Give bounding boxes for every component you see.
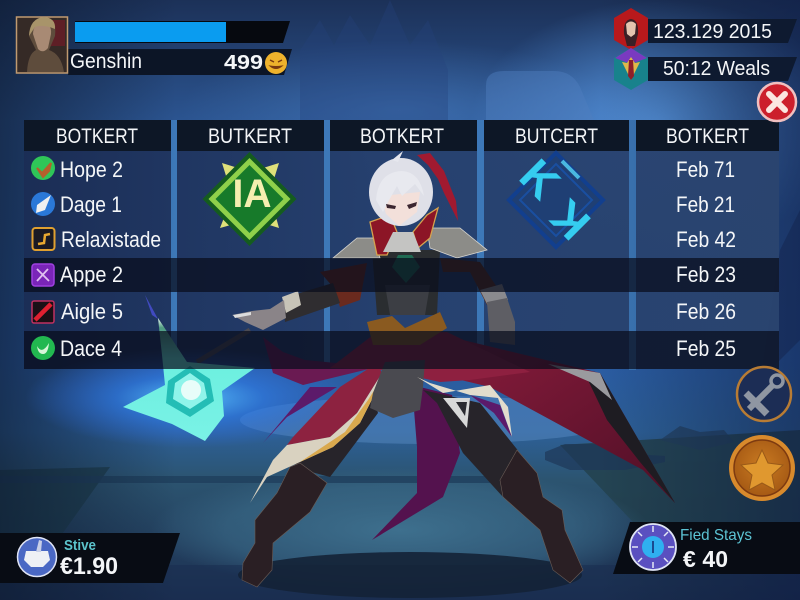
row 2: Dage 1: Dage 1 xyxy=(60,192,122,217)
row 4: Appe 2: Appe 2 xyxy=(60,262,123,287)
icon: gold star coin xyxy=(729,435,795,501)
icon: blue dial xyxy=(630,524,676,570)
panel: bottom left stats: Stive xyxy=(64,537,96,554)
player status panel xyxy=(16,17,292,75)
icon: red hexagon portrait xyxy=(614,8,648,50)
crimson cape left with trim xyxy=(250,363,387,503)
panel: bottom left stats xyxy=(0,533,180,583)
date column: Feb 71 xyxy=(676,157,735,182)
boots xyxy=(242,450,583,587)
player name: Genshin xyxy=(70,50,142,73)
health bar xyxy=(75,21,290,43)
date column: Feb 21 xyxy=(676,192,735,217)
icon: green IA badge xyxy=(202,152,296,246)
purple cloth xyxy=(372,385,460,540)
row 1: Hope 2: Hope 2 xyxy=(60,157,123,182)
row 6: Dace 4 xyxy=(31,336,122,361)
row 5: Aigle 5 xyxy=(32,299,123,324)
row 2: Dage 1 xyxy=(31,192,122,217)
shadow under character xyxy=(238,552,582,598)
head with white hair xyxy=(369,151,458,226)
icon: green IA badge: IA xyxy=(232,172,272,216)
panel: bottom right stats: € 40 xyxy=(683,546,728,572)
date column: Feb 25 xyxy=(676,336,736,361)
header labels xyxy=(56,125,749,148)
score: 499 xyxy=(224,52,263,74)
row 3: Relaxistade: Relaxistade xyxy=(61,227,161,252)
icon: blue KK badge: K xyxy=(510,149,570,209)
row 5: Aigle 5: Aigle 5 xyxy=(61,299,123,324)
resource panel 2 xyxy=(614,48,797,90)
character xyxy=(232,151,675,598)
row 6: Dace 4: Dace 4 xyxy=(60,336,122,361)
date column: Feb 23 xyxy=(676,262,736,287)
pauldrons xyxy=(333,228,487,258)
resource panel 1 xyxy=(614,8,797,50)
row 1: Hope 2 xyxy=(31,156,123,182)
resource panel 1: 123.129 2015 xyxy=(653,21,772,43)
legs xyxy=(293,390,537,497)
panel: bottom right stats: Fied Stays xyxy=(680,527,752,544)
panel: table columns xyxy=(24,151,779,369)
icon: teal hexagon crest xyxy=(614,48,648,90)
light gaps between columns xyxy=(171,120,636,370)
skirt and tassets xyxy=(330,332,530,437)
date column xyxy=(676,157,736,361)
panel: bottom right stats xyxy=(613,522,800,574)
header labels: BOTKERT xyxy=(666,125,749,148)
torso xyxy=(372,250,440,315)
icon: wrench ring button xyxy=(737,367,791,421)
panel: table headers xyxy=(24,120,779,151)
date column: Feb 42 xyxy=(676,227,736,252)
header labels: BOTKERT xyxy=(360,125,444,148)
header labels: BUTCERT xyxy=(515,125,598,148)
dark row bands xyxy=(24,258,779,369)
icon: blue KK badge: K xyxy=(540,190,600,250)
icon: close button xyxy=(758,83,796,121)
star-tipped spear xyxy=(123,295,255,441)
header labels: BUTKERT xyxy=(208,125,292,148)
icon: thumbs up xyxy=(18,538,56,576)
icon: smiling emoji xyxy=(265,52,287,74)
avatar xyxy=(16,17,68,73)
red collar xyxy=(370,208,438,255)
icon: blue KK badge xyxy=(509,149,603,250)
crimson cape right xyxy=(440,340,675,503)
name plate xyxy=(68,49,292,75)
purple ribbons xyxy=(263,337,512,443)
belt xyxy=(367,312,447,345)
resource panel 2: 50:12 Weals xyxy=(663,58,770,80)
date column: Feb 26 xyxy=(676,299,736,324)
row 4: Appe 2 xyxy=(32,262,123,287)
left arm xyxy=(232,263,367,330)
row 3: Relaxistade xyxy=(32,227,161,252)
panel: bottom left stats: €1.90 xyxy=(60,553,118,580)
staff glow xyxy=(25,348,355,448)
right arm xyxy=(440,258,515,345)
header labels: BOTKERT xyxy=(56,125,138,148)
